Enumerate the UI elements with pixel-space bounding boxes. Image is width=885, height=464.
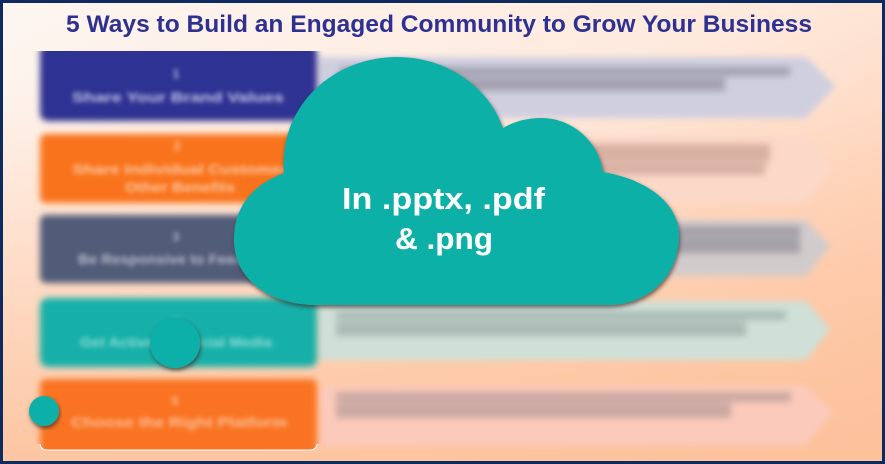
cloud text: In .pptx, .pdf [342, 181, 546, 216]
step 2 bar: Share Individual Customer [72, 161, 288, 177]
cloud text: & .png [395, 221, 493, 256]
step 3 bar: 3 [173, 230, 180, 244]
blurred arrows behind the steps [318, 57, 835, 445]
decorative teal circle, large [150, 318, 200, 368]
step 3 bar: Be Responsive to Feedback [78, 251, 278, 267]
step 4 bar: Get Active on Social Media [80, 334, 272, 350]
step 2 bar: Other Benefits [125, 179, 235, 195]
step 4 bar [40, 298, 317, 367]
step 5 bar: Choose the Right Platform: 5 [172, 394, 179, 408]
decorative teal circle, small [29, 396, 59, 426]
step 2 bar [40, 134, 317, 203]
step 1 bar: Share Your Brand Values: 1 [173, 67, 180, 81]
step 5 bar bottom highlight [40, 444, 317, 450]
cloud shape [234, 57, 679, 305]
blurred description placeholders [336, 67, 800, 418]
cloud callout [234, 57, 679, 305]
title: 5 Ways to Build an Engaged Community to Grow Your Business [66, 11, 812, 38]
step 1 bar: Share Your Brand Values: Share Your Brand Values [72, 89, 284, 105]
step 1 bar: Share Your Brand Values [40, 44, 317, 121]
step 3 bar [40, 215, 317, 283]
step 4 bar: — [172, 313, 180, 323]
step 5 bar: Choose the Right Platform: Choose the Right Platform [71, 414, 287, 430]
step 5 bar: Choose the Right Platform [40, 379, 317, 459]
step 2 bar: 2 [174, 139, 181, 153]
